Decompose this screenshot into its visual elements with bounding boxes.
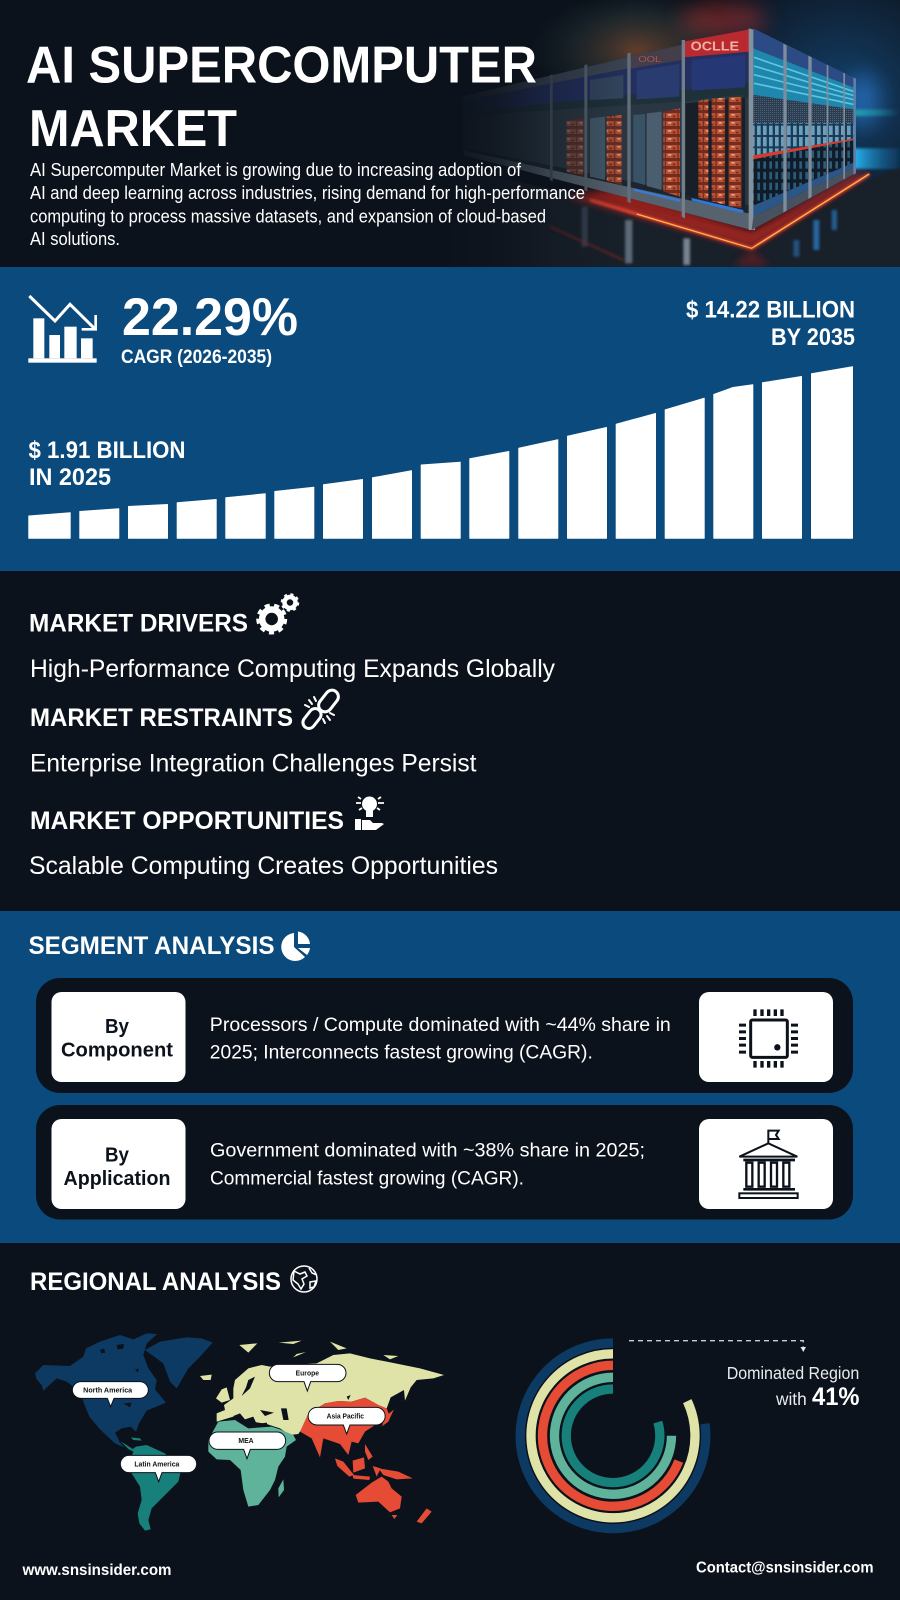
description: computing to process massive datasets, and expansion of cloud-based: [30, 205, 546, 226]
CAGR label: CAGR (2026-2035): [121, 347, 272, 368]
icon: chart with trend arrow: [28, 296, 97, 363]
card: by application: Application: [64, 1167, 170, 1190]
description: AI solutions.: [30, 228, 120, 249]
card: by application: [36, 1105, 853, 1220]
dominated region callout: [727, 1363, 860, 1411]
callout: Latin America: [120, 1455, 197, 1482]
heading: market drivers: MARKET DRIVERS: [29, 610, 248, 638]
floor: [540, 167, 900, 267]
footer contact: Contact@snsinsider.com: [696, 1560, 874, 1576]
2025 value: IN 2025: [29, 464, 111, 491]
CAGR value: 22.29%: [122, 288, 298, 347]
heading: segment analysis: SEGMENT ANALYSIS: [28, 932, 274, 960]
callout: Europe: [269, 1364, 346, 1391]
world map: [35, 1333, 444, 1531]
title: MARKET: [29, 100, 237, 158]
callout: North America: [72, 1382, 148, 1407]
radial ring chart: [520, 1343, 706, 1529]
region: Latin America: [121, 1437, 181, 1531]
description: [30, 159, 585, 249]
callout: Europe: Europe: [296, 1371, 319, 1378]
dominated region callout: with: [775, 1389, 807, 1409]
heading: market restraints: MARKET RESTRAINTS: [30, 704, 293, 732]
right face of racks: [752, 28, 856, 230]
cabinet 1 header: [683, 29, 750, 57]
icon: gears: [258, 594, 298, 632]
card: by application: By: [105, 1144, 130, 1167]
panel: market size: [0, 267, 900, 571]
card: by application: Government dominated with ~38% share in 2025;: [210, 1140, 645, 1162]
left face of racks: OOL: [638, 54, 661, 64]
description: AI and deep learning across industries, rising demand for high-performance: [30, 182, 585, 203]
2035 value: [686, 296, 855, 351]
dominated region callout: 41%: [812, 1383, 860, 1411]
card: by component: Component: [61, 1039, 173, 1062]
card: by component: [36, 978, 853, 1093]
region: Europe: [200, 1341, 444, 1435]
title: [26, 36, 537, 158]
text: restraint: Enterprise Integration Challenges Persist: [30, 750, 477, 778]
icon: hand with light bulb: [355, 796, 384, 830]
text: driver: High-Performance Computing Expands Globally: [30, 655, 555, 683]
left face of racks: [463, 28, 755, 230]
2035 value: BY 2035: [771, 324, 855, 351]
region: Asia Pacific: [300, 1398, 432, 1523]
region: North America: [35, 1333, 213, 1447]
hero left fade: [440, 0, 630, 267]
callout: MEA: [209, 1432, 286, 1459]
region: Middle East and Africa: [208, 1420, 296, 1507]
card: by component: By: [105, 1015, 130, 1038]
rack brand text: OCLLE: [691, 40, 739, 54]
dominated region callout: Dominated Region: [727, 1363, 859, 1383]
card: by application: Commercial fastest growing (CAGR).: [210, 1167, 524, 1189]
icon: pie chart: [281, 932, 310, 961]
callout: MEA: MEA: [238, 1438, 254, 1445]
heading: market opportunities: MARKET OPPORTUNITIES: [30, 807, 344, 835]
callout: Asia Pacific: Asia Pacific: [327, 1414, 364, 1421]
footer website: www.snsinsider.com: [22, 1562, 171, 1579]
hero image: supercomputer racks: [450, 0, 900, 267]
icon: processor chip: [739, 1009, 798, 1068]
callout: North America: North America: [83, 1387, 132, 1394]
heading: regional analysis: REGIONAL ANALYSIS: [30, 1268, 281, 1296]
panel: segment analysis: [0, 911, 900, 1243]
callout: Latin America: Latin America: [134, 1461, 179, 1468]
floor glow: [550, 173, 869, 267]
bar chart: [29, 367, 853, 538]
callout: Asia Pacific: [308, 1407, 385, 1434]
top header background: [0, 0, 900, 267]
title: AI SUPERCOMPUTER: [26, 36, 537, 94]
card: by component: 2025; Interconnects fastest growing (CAGR).: [210, 1042, 593, 1064]
icon: government building: [739, 1131, 798, 1198]
dashed leader arrow: [629, 1341, 806, 1352]
map water cut-outs: [100, 1344, 351, 1442]
card: by component: Processors / Compute dominated with ~44% share in: [210, 1014, 671, 1036]
2025 value: [28, 437, 186, 491]
2035 value: $ 14.22 BILLION: [686, 296, 855, 323]
panel: regional analysis background: [0, 1243, 900, 1600]
icon: globe: [291, 1266, 317, 1292]
panel: market dynamics: [0, 571, 900, 911]
2025 value: $ 1.91 BILLION: [28, 437, 186, 464]
description: AI Supercomputer Market is growing due to increasing adoption of: [30, 159, 522, 180]
text: opportunity: Scalable Computing Creates Opportunities: [29, 852, 498, 880]
icon: broken chain: [300, 688, 341, 731]
